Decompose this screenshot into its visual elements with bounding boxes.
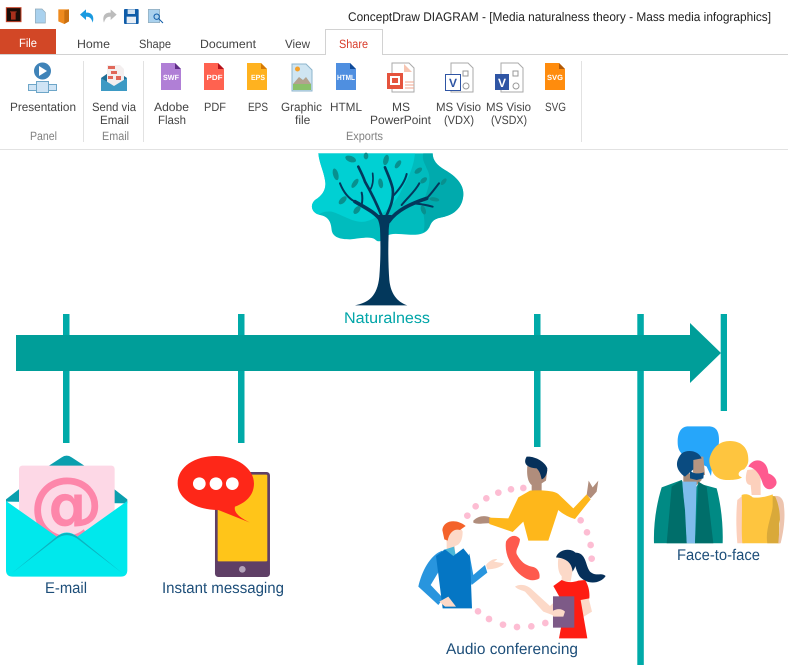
icon: presentation [28, 62, 56, 92]
ribbon labels: Send via [92, 100, 136, 114]
window title: ConceptDraw DIAGRAM - [Media naturalness theory - Mass media infographics] [348, 10, 771, 24]
icon: MS Visio VSDX [495, 63, 523, 92]
ribbon labels: PDF [204, 100, 226, 114]
tab bar: Document [200, 37, 257, 51]
ribbon labels: MS Visio [436, 100, 481, 114]
ribbon labels: Email [100, 113, 129, 127]
man in green jacket [654, 451, 723, 543]
ribbon labels: Exports [346, 129, 383, 143]
icon: PDF file: PDF [206, 73, 223, 82]
ribbon separators [0, 61, 788, 150]
ribbon labels: Panel [30, 129, 57, 143]
ribbon labels: EPS [248, 100, 268, 114]
ribbon labels: MS Visio [486, 100, 531, 114]
icon: e-mail envelope [6, 456, 127, 577]
ribbon labels: (VDX) [444, 113, 474, 127]
label: instant messaging: Instant messaging [162, 580, 284, 597]
ribbon labels [10, 100, 566, 143]
icon: send via email [101, 65, 127, 91]
woman in red dress [515, 550, 606, 638]
quick access icons [6, 8, 163, 24]
tab bar: View [285, 37, 310, 51]
icon: EPS file: EPS [251, 73, 265, 82]
blue speech bubble [678, 426, 719, 476]
dotted ring [464, 485, 595, 630]
letter with at sign: @ [29, 461, 103, 547]
icon: face-to-face conversation [654, 426, 784, 543]
icon: MS Visio VDX: V [449, 76, 457, 90]
ribbon labels: Presentation [10, 100, 76, 114]
woman in yellow dress [736, 460, 784, 543]
tab bar: Shape [139, 37, 171, 51]
label: face-to-face: Face-to-face [677, 547, 760, 564]
label: e-mail: E-mail [45, 580, 87, 597]
icon: EPS file [247, 63, 267, 90]
tab bar: File [19, 36, 37, 50]
icon: MS Visio VSDX: V [498, 76, 506, 90]
man in blue vest [418, 521, 504, 608]
icon: SWF file: SWF [163, 73, 179, 82]
tree leaves [332, 153, 448, 215]
ribbon labels: Email [102, 129, 129, 143]
telephone handset [506, 536, 540, 580]
icon: SVG file [545, 63, 565, 90]
label: audio conferencing: Audio conferencing [446, 641, 578, 658]
ribbon labels: SVG [545, 100, 566, 114]
label: naturalness: Naturalness [344, 310, 430, 327]
application toolbar [0, 8, 788, 150]
ribbon labels: Adobe [154, 100, 189, 114]
ribbon labels: PowerPoint [370, 113, 432, 127]
person in yellow sweater [473, 457, 598, 541]
icon: PDF file [204, 63, 224, 90]
icon: graphic file [292, 64, 312, 91]
icon: MS PowerPoint [387, 63, 414, 92]
ribbon labels: (VSDX) [491, 113, 527, 127]
icon: SVG file: SVG [547, 73, 563, 82]
icon: HTML file: HTML [337, 73, 355, 82]
tab bar: Home [77, 37, 110, 51]
tree branches [340, 167, 439, 222]
yellow speech bubble [709, 441, 748, 480]
timeline ticks [63, 314, 727, 665]
ribbon labels: HTML [330, 100, 362, 114]
icon: SWF file [161, 63, 181, 90]
icon: smartphone with speech bubble [178, 456, 270, 577]
icon: tree [312, 153, 463, 305]
ribbon labels: Graphic [281, 100, 322, 114]
tab bar: Share [339, 37, 368, 51]
ribbon labels: file [295, 113, 311, 127]
icon: audio conferencing people [418, 457, 606, 638]
speech bubble [178, 456, 254, 523]
tab bar [0, 29, 788, 54]
ribbon labels: MS [392, 100, 410, 114]
ribbon labels: Flash [158, 113, 186, 127]
icon: HTML file [336, 63, 356, 90]
icon: MS Visio VDX [446, 63, 473, 92]
naturalness arrow [16, 323, 721, 383]
tree trunk [355, 215, 407, 305]
